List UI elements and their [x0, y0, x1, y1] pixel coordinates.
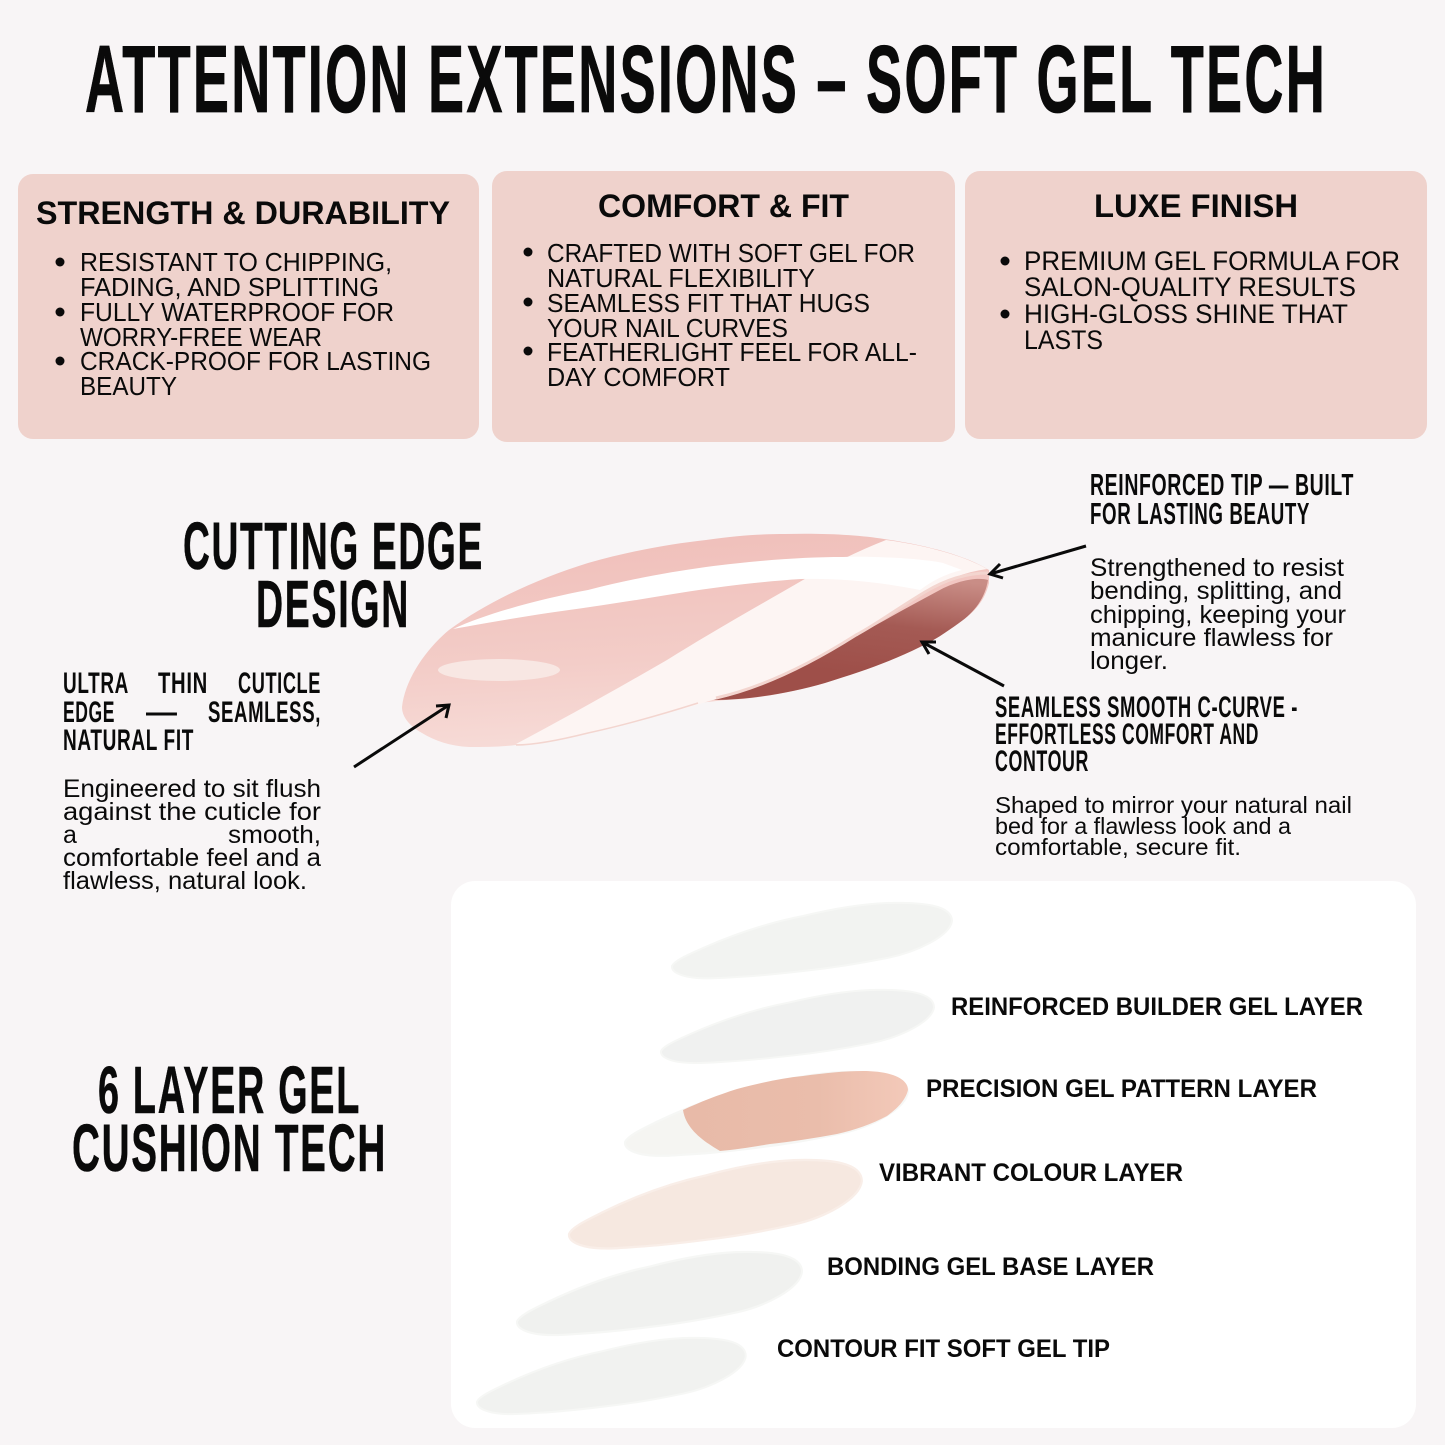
label: vibrant colour layer: VIBRANT COLOUR LAYER [879, 1159, 1183, 1187]
callout: cuticle edge: against the cuticle for [63, 798, 321, 826]
panel: layer diagram [451, 881, 1416, 1428]
panel: strength and durability [18, 174, 479, 439]
heading: 6 layer gel cushion tech: 6 LAYER GEL [98, 1053, 361, 1128]
bullet list: luxe: HIGH-GLOSS SHINE THAT [1024, 299, 1348, 329]
callout: c-curve [995, 691, 1352, 860]
callout: cuticle edge: Engineered to sit flush [63, 775, 321, 803]
layer 2 shape [661, 990, 934, 1063]
underside shadow [714, 579, 988, 700]
nail body [402, 534, 989, 747]
callout: cuticle edge [63, 667, 321, 895]
label: reinforced builder gel layer: REINFORCED BUILDER GEL LAYER [951, 993, 1363, 1021]
bullet list: strength: BEAUTY [80, 371, 177, 401]
layer 6 shape [477, 1338, 746, 1414]
callout: cuticle edge: a [63, 821, 77, 849]
heading: cutting edge design: CUTTING EDGE [183, 509, 484, 584]
arrow: cuticle edge [354, 705, 449, 767]
callout: c-curve: Shaped to mirror your natural nail [995, 792, 1352, 818]
bullet list: luxe [1000, 246, 1400, 355]
tip glossy band [516, 540, 987, 744]
callout: cuticle edge: NATURAL FIT [63, 724, 194, 757]
callout: cuticle edge: EDGE [63, 696, 115, 729]
heading: luxe finish: LUXE FINISH [1094, 188, 1298, 224]
callout: reinforced tip: longer. [1090, 647, 1168, 675]
layer 5 shape [517, 1252, 802, 1335]
callout: reinforced tip: Strengthened to resist [1090, 554, 1344, 582]
glare oval [438, 659, 560, 681]
callout: reinforced tip: chipping, keeping your [1090, 601, 1346, 629]
callout: reinforced tip: bending, splitting, and [1090, 577, 1342, 605]
heading: cutting edge design: DESIGN [256, 567, 410, 642]
callout: reinforced tip: manicure flawless for [1090, 624, 1333, 652]
heading: cutting edge design [183, 509, 484, 642]
top highlight streak [453, 557, 962, 629]
callout: c-curve: comfortable, secure fit. [995, 834, 1241, 860]
bullet list: strength [56, 247, 431, 401]
callout: cuticle edge: — [146, 696, 178, 729]
callout: cuticle edge: comfortable feel and a [63, 844, 321, 872]
callout: cuticle edge: ULTRA [63, 667, 129, 700]
bullet list: comfort: NATURAL FLEXIBILITY [547, 263, 815, 293]
bullet list: strength: CRACK-PROOF FOR LASTING [80, 346, 431, 376]
heading: strength and durability: STRENGTH & DURABILITY [36, 195, 450, 231]
callout: cuticle edge: smooth, [228, 821, 321, 849]
bottom edge line [516, 703, 698, 745]
label: precision gel pattern layer: PRECISION GEL PATTERN LAYER [926, 1075, 1317, 1103]
bullet list: comfort [524, 238, 917, 392]
arrow: c-curve [922, 642, 1004, 686]
panel: luxe finish [965, 171, 1427, 439]
callout: c-curve: CONTOUR [995, 745, 1089, 778]
callout: cuticle edge: THIN [158, 667, 208, 700]
illustration: nail tip [402, 534, 989, 747]
callout: cuticle edge: flawless, natural look. [63, 867, 307, 895]
callout: cuticle edge: CUTICLE [238, 667, 321, 700]
heading: 6 layer gel cushion tech [72, 1053, 387, 1186]
layer 1 shape [672, 903, 952, 978]
bullet list: comfort: YOUR NAIL CURVES [547, 313, 788, 343]
heading: comfort and fit: COMFORT & FIT [598, 188, 849, 224]
callout: c-curve: EFFORTLESS COMFORT AND [995, 718, 1259, 751]
bullet list: strength: FULLY WATERPROOF FOR [80, 297, 394, 327]
callout: reinforced tip: FOR LASTING BEAUTY [1090, 496, 1310, 531]
heading: 6 layer gel cushion tech: CUSHION TECH [72, 1111, 387, 1186]
label: contour fit soft gel tip: CONTOUR FIT SOFT GEL TIP [777, 1335, 1110, 1363]
bullet list: comfort: SEAMLESS FIT THAT HUGS [547, 288, 870, 318]
layer 3 shape [625, 1071, 908, 1156]
bullet list: strength: RESISTANT TO CHIPPING, [80, 247, 392, 277]
bullet list: strength: FADING, AND SPLITTING [80, 272, 379, 302]
callout: cuticle edge: SEAMLESS, [208, 696, 321, 729]
bullet list: strength: WORRY-FREE WEAR [80, 322, 322, 352]
arrow: reinforced tip [990, 546, 1086, 578]
bullet list: luxe: PREMIUM GEL FORMULA FOR [1024, 246, 1400, 276]
layer 4 shape [569, 1160, 862, 1248]
callout: c-curve: bed for a flawless look and a [995, 813, 1291, 839]
bullet list: comfort: DAY COMFORT [547, 362, 730, 392]
label: bonding gel base layer: BONDING GEL BASE LAYER [827, 1253, 1154, 1281]
bullet list: luxe: SALON-QUALITY RESULTS [1024, 272, 1356, 302]
bullet list: comfort: CRAFTED WITH SOFT GEL FOR [547, 238, 915, 268]
bullet list: comfort: FEATHERLIGHT FEEL FOR ALL- [547, 337, 917, 367]
bullet list: luxe: LASTS [1024, 325, 1103, 355]
rim line [716, 573, 988, 698]
panel: comfort and fit [492, 171, 955, 442]
callout: reinforced tip [1090, 467, 1354, 675]
